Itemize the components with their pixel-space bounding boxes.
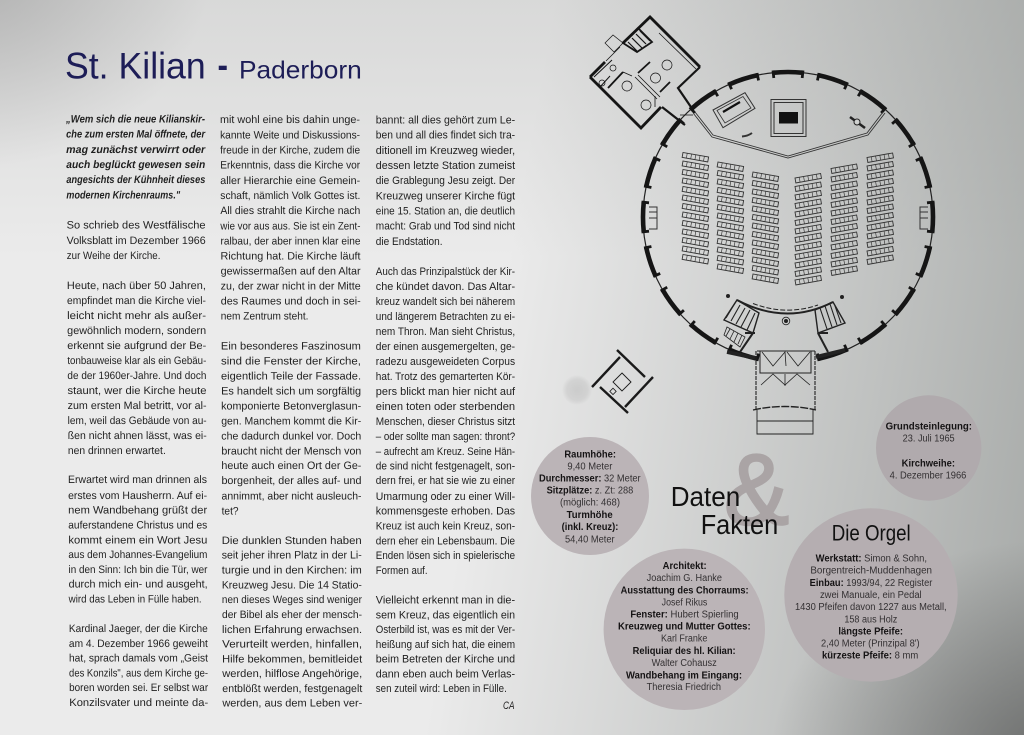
ambo	[850, 117, 865, 128]
text column 3: Auch das Prinzipalstück der Kir-	[376, 266, 515, 278]
circle: Architekt: Architekt:	[663, 561, 707, 572]
circle: Die Orgel: zwei Manuale, ein Pedal	[820, 590, 922, 601]
text column 2: ralbau, der aber innen klar eine	[220, 235, 361, 247]
text column 2: Kreuzweg Jesu. Die 14 Statio-	[222, 579, 362, 591]
italic opening quote: auch beglückt gewesen sein	[66, 159, 206, 171]
circle: Architekt	[604, 549, 765, 710]
text column 3: nem Thron. Man sieht Christus,	[376, 326, 515, 338]
text column 2: Richtung hat. Die Kirche läuft	[221, 251, 361, 263]
text column 3: dern frei, er hat sie wie zu einer	[376, 475, 515, 487]
circle: Architekt: Kreuzweg und Mutter Gottes:	[618, 622, 751, 633]
column 1 body text: hat, sprach damals vom „Geist	[69, 653, 208, 665]
title: Paderborn	[239, 56, 362, 84]
text column 3: – oder sollte man sagen: thront?	[376, 431, 515, 443]
column 1 body text: de der 1960er-Jahre. Und doch	[67, 370, 206, 382]
circle: Grundsteinlegung: 23. Juli 1965	[903, 434, 955, 445]
column 1 body text: erstes vom Hausherrn. Auf ei-	[68, 490, 207, 502]
column 1 body text: auferstandene Christus und es	[68, 520, 208, 531]
text column 2: Es handelt sich um sorgfältig	[221, 386, 361, 397]
text column 3: die Endstation.	[376, 236, 442, 248]
circle: Raumhöhe: 9,40 Meter	[567, 461, 613, 472]
text column 2: che dadurch dunkel vor. Doch	[221, 431, 361, 442]
text column 2: eigentlich Teile der Fassade.	[221, 371, 361, 382]
circle: Die Orgel: kürzeste Pfeife: 8 mm	[822, 651, 918, 662]
title	[65, 44, 362, 86]
text column 2: aller Hierarchie eine Gemein-	[220, 175, 361, 187]
text column 2: des Raumes und doch in sei-	[221, 296, 361, 307]
circle: Die Orgel	[784, 508, 958, 682]
text column 2: turgie und in den Kirchen: im	[222, 565, 362, 577]
text column 3: sen zuteil wird: Leben in Fülle.	[376, 683, 507, 695]
column 1 body text: empfindet man die Kirche viel-	[67, 295, 206, 307]
text column 3: heißung auf sich hat, die einem	[376, 639, 515, 651]
church floor plan	[590, 17, 934, 434]
text column 3: eine 15. Station an, die deutlich	[376, 206, 515, 218]
text column 3: Vielleicht erkennt man in die-	[376, 594, 516, 606]
text column 3: und längerem Betrachten zu ei-	[376, 311, 515, 323]
decorative smudge	[562, 375, 592, 405]
text column 3: dann eben auch beim Verlas-	[376, 668, 515, 680]
text column 3: ben und all dies findet sich tra-	[376, 130, 515, 142]
text column 2: wie vor aus aus. Sie ist ein Zent-	[220, 220, 361, 232]
text column 3	[376, 114, 516, 712]
text column 2: annimmt, aber nicht ausleuch-	[221, 491, 362, 502]
altar	[771, 100, 806, 136]
text column 2: gewissermaßen auf den Altar	[221, 266, 361, 278]
text column 2: nen dieses Weges sind weniger	[222, 594, 362, 606]
text column 2: komponierte Betonverglasun-	[221, 401, 362, 412]
circle: Grundsteinlegung: Kirchweihe:	[902, 458, 955, 469]
text column 2: borgenheit, der alles auf- und	[221, 475, 361, 487]
circle: Raumhöhe: Raumhöhe:	[564, 449, 616, 460]
column 1 body text: zum ersten Mal betritt, vor al-	[68, 400, 207, 412]
circle: Die Orgel: Die Orgel	[832, 521, 911, 546]
italic opening quote: „Wem sich die neue Kilianskir-	[65, 114, 205, 125]
text column 3: Umarmung oder zu einer Will-	[376, 491, 515, 503]
circle: Architekt: Reliquiar des hl. Kilian:	[633, 646, 736, 657]
text column 3: CA	[503, 700, 514, 712]
circle: Architekt: Josef Rikus	[662, 597, 707, 608]
text column 2: werden, hilflose Angehörige,	[221, 668, 362, 680]
pew blocks	[682, 152, 893, 285]
text column 2: braucht nicht der Mensch von	[221, 446, 361, 457]
sacristy annex	[590, 17, 700, 128]
column 1 body text: erkennt sie aufgrund der Be-	[67, 340, 207, 352]
text column 2: Erkenntnis, dass die Kirche vor	[220, 160, 361, 172]
circle: Grundsteinlegung	[876, 395, 981, 501]
column 1 body text: staunt, wer die Kirche heute	[67, 385, 207, 397]
column 1 body text: gewöhnlich modern, sondern	[67, 325, 206, 337]
column 1 body text: kommt einem ein Wort Jesu	[68, 534, 207, 546]
text column 3: Kreuz ist auch kein Kreuz, son-	[376, 520, 515, 532]
text column 3: ditionell im Kreuzweg wieder,	[376, 145, 515, 157]
text column 3: beim Betreten der Kirche und	[376, 654, 515, 666]
text column 2: nem Zentrum steht.	[221, 311, 309, 322]
text column 2: seit jeher ihren Platz in der Li-	[222, 550, 362, 562]
text column 3: Menschen, dieser Christus sitzt	[376, 416, 515, 428]
side table	[713, 93, 755, 136]
column 1 body text: nem Wandbehang grüßt der	[68, 505, 208, 517]
text column 2: tet?	[222, 505, 239, 517]
text column 2: heute auch einen Ort der Ge-	[221, 460, 362, 472]
circle: Architekt: Karl Franke	[661, 634, 708, 645]
circle: Architekt: Joachim G. Hanke	[647, 573, 722, 584]
column 1 body text: Konzilsvater und meinte da-	[69, 697, 209, 709]
circle: Architekt: Wandbehang im Eingang:	[626, 670, 742, 681]
circle: Raumhöhe: (möglich: 468)	[560, 498, 620, 509]
text column 2: Verurteilt werden, hinfallen,	[222, 639, 362, 651]
title: St. Kilian	[65, 45, 206, 86]
column 1 body text: zur Weihe der Kirche.	[67, 250, 160, 262]
italic opening quote: angesichts der Kühnheit dieses	[66, 174, 205, 186]
text column 3: Kreuzweg unserer Kirche fügt	[376, 190, 515, 202]
column 1 body text: wird das Leben in Fülle haben.	[68, 594, 202, 605]
text column 3: hat. Trotz des gemarterten Kör-	[376, 371, 515, 383]
column 1 body text: Heute, nach über 50 Jahren,	[67, 280, 206, 292]
circle: Die Orgel: Borgentreich-Muddenhagen	[810, 566, 932, 577]
column 1 body text: lem, weil das Gebäude von au-	[68, 415, 207, 427]
text column 3: radezu ausgeweideten Corpus	[376, 356, 516, 368]
circle: Die Orgel: längste Pfeife:	[838, 626, 903, 637]
bell tower	[592, 350, 653, 413]
text column 3: Enden lösen sich in spielerische	[376, 550, 515, 562]
text column 3: der einen ausgemergelten, ge-	[376, 341, 515, 353]
text column 2: freude in der Kirche, zudem die	[220, 144, 360, 156]
text column 2: Die dunklen Stunden haben	[222, 535, 362, 547]
organ loft and stairs	[724, 294, 845, 352]
text column 2: der Bibel als eher der mensch-	[222, 609, 362, 621]
circle: Raumhöhe: Turmhöhe	[567, 510, 613, 521]
column 1 body text: in den Sinn: Ich bin die Tür, wer	[68, 564, 208, 576]
column 1 body text: am 4. Dezember 1966 geweiht	[69, 638, 208, 650]
circle: Architekt: Theresia Friedrich	[647, 682, 721, 693]
text column 3: kreuz wandelt sich bei näherem	[376, 296, 515, 308]
text column 3: Osterbild ist, was es mit der Ver-	[376, 624, 515, 636]
circle: Die Orgel: 158 aus Holz	[844, 614, 897, 625]
text column 2: mit wohl eine bis dahin unge-	[220, 114, 360, 126]
text column 3: bannt: all dies gehört zum Le-	[376, 114, 515, 126]
circle: Grundsteinlegung: 4. Dezember 1966	[890, 470, 967, 481]
text column 3: che kündet davon. Das Altar-	[376, 281, 515, 293]
text column 3: dern eher ein Lebensbaum. Die	[376, 535, 515, 547]
text column 3: kommensgeste erhoben. Das	[376, 506, 516, 518]
column 1 body text: aus dem Johannes-Evangelium	[68, 549, 207, 561]
text column 3: die Grablegung Jesu zeigt. Der	[376, 175, 515, 187]
text column 2: Ein besonderes Faszinosum	[221, 341, 361, 352]
circle: Die Orgel: Werkstatt: Simon & Sohn,	[816, 553, 927, 564]
text column 3: macht: Grab und Tod sind nicht	[376, 221, 515, 233]
title: -	[218, 44, 228, 85]
text column 2: sind die Fenster der Kirche,	[221, 356, 361, 367]
column 1 body text: boren worden sei. Er selbst war	[69, 682, 209, 694]
circle: Die Orgel: 2,40 Meter (Prinzipal 8')	[821, 638, 920, 649]
circle: Architekt: Walter Cohausz	[652, 658, 717, 669]
circle: Die Orgel: Einbau: 1993/94, 22 Register	[810, 578, 933, 589]
italic opening quote: mag zunächst verwirrt oder	[66, 144, 206, 156]
italic opening quote	[65, 114, 206, 201]
text column 2: gen. Manchem kommt die Kir-	[221, 416, 362, 427]
circle: Architekt: Ausstattung des Chorraums:	[621, 585, 749, 596]
column 1 body text: Erwartet wird man drinnen als	[68, 474, 208, 486]
circle: Raumhöhe	[531, 437, 649, 555]
column 1 body text: leicht nicht mehr als außer-	[67, 310, 207, 322]
large ampersand: &	[724, 434, 789, 546]
text column 2: entblößt werden, festgenagelt	[222, 683, 362, 695]
circle: Raumhöhe: (inkl. Kreuz):	[562, 522, 618, 533]
text column 3: dessen letzte Station zumeist	[376, 160, 515, 172]
text column 2: lichen Erfahrung erwachsen.	[222, 624, 362, 636]
text column 2: zu, der zwar nicht in der Mitte	[221, 281, 361, 292]
text column 3: einen toten oder sterbenden	[376, 401, 515, 413]
text column 3: Formen auf.	[376, 565, 428, 577]
text column 3: sem Kreuz, das eigentlich ein	[376, 609, 515, 621]
column 1 body text: tonbauweise klar als ein Gebäu-	[67, 355, 207, 367]
text column 3: – aufrecht am Kreuz. Seine Hän-	[376, 446, 515, 458]
circle: Raumhöhe: 54,40 Meter	[565, 534, 615, 545]
text column 3: de sind nicht festgenagelt, son-	[376, 461, 515, 473]
heading: Daten und Fakten	[671, 481, 778, 540]
chancel rail	[694, 112, 885, 158]
text column 2: All dies strahlt die Kirche nach	[220, 205, 360, 217]
italic opening quote: che zum ersten Mal öffnete, der	[66, 129, 206, 141]
text column 1	[65, 114, 209, 709]
circle: Raumhöhe: Sitzplätze: z. Zt: 288	[547, 486, 634, 497]
circle: Die Orgel: 1430 Pfeifen davon 1227 aus Metall,	[795, 602, 947, 613]
outer circular wall	[642, 70, 934, 361]
column 1 body text: durch mich ein- und ausgeht,	[69, 579, 208, 591]
heading: Daten und Fakten: Fakten	[701, 509, 778, 540]
circle: Architekt: Fenster: Hubert Spierling	[630, 610, 739, 621]
italic opening quote: modernen Kirchenraums."	[66, 189, 181, 201]
column 1 body text: ßen nicht ahnen lässt, was ei-	[68, 430, 207, 442]
column 1 body text: Kardinal Jaeger, der die Kirche	[69, 623, 208, 635]
text column 2: Hilfe bekommen, bemitleidet	[222, 653, 362, 665]
column 1 body text: nen drinnen erwartet.	[68, 445, 166, 457]
circle: Grundsteinlegung: Grundsteinlegung:	[886, 422, 972, 433]
column 1 body text: Volksblatt im Dezember 1966	[67, 235, 206, 247]
text column 2: werden, aus dem Leben ver-	[221, 698, 363, 710]
text column 2	[219, 114, 363, 710]
column 1 body text	[66, 220, 209, 709]
column 1 body text: So schrieb des Westfälische	[67, 220, 206, 232]
text column 2: schaft, nämlich Volk Gottes ist.	[220, 190, 360, 202]
text column 2: kannte Weite und Diskussions-	[220, 129, 360, 141]
entrance hall	[727, 350, 845, 434]
heading: Daten und Fakten: Daten	[671, 481, 740, 512]
column 1 body text: des Konzils", aus dem Kirche ge-	[69, 667, 208, 679]
text column 3: pers blickt man hier nicht auf	[376, 386, 516, 398]
circle: Raumhöhe: Durchmesser: 32 Meter	[539, 474, 641, 485]
